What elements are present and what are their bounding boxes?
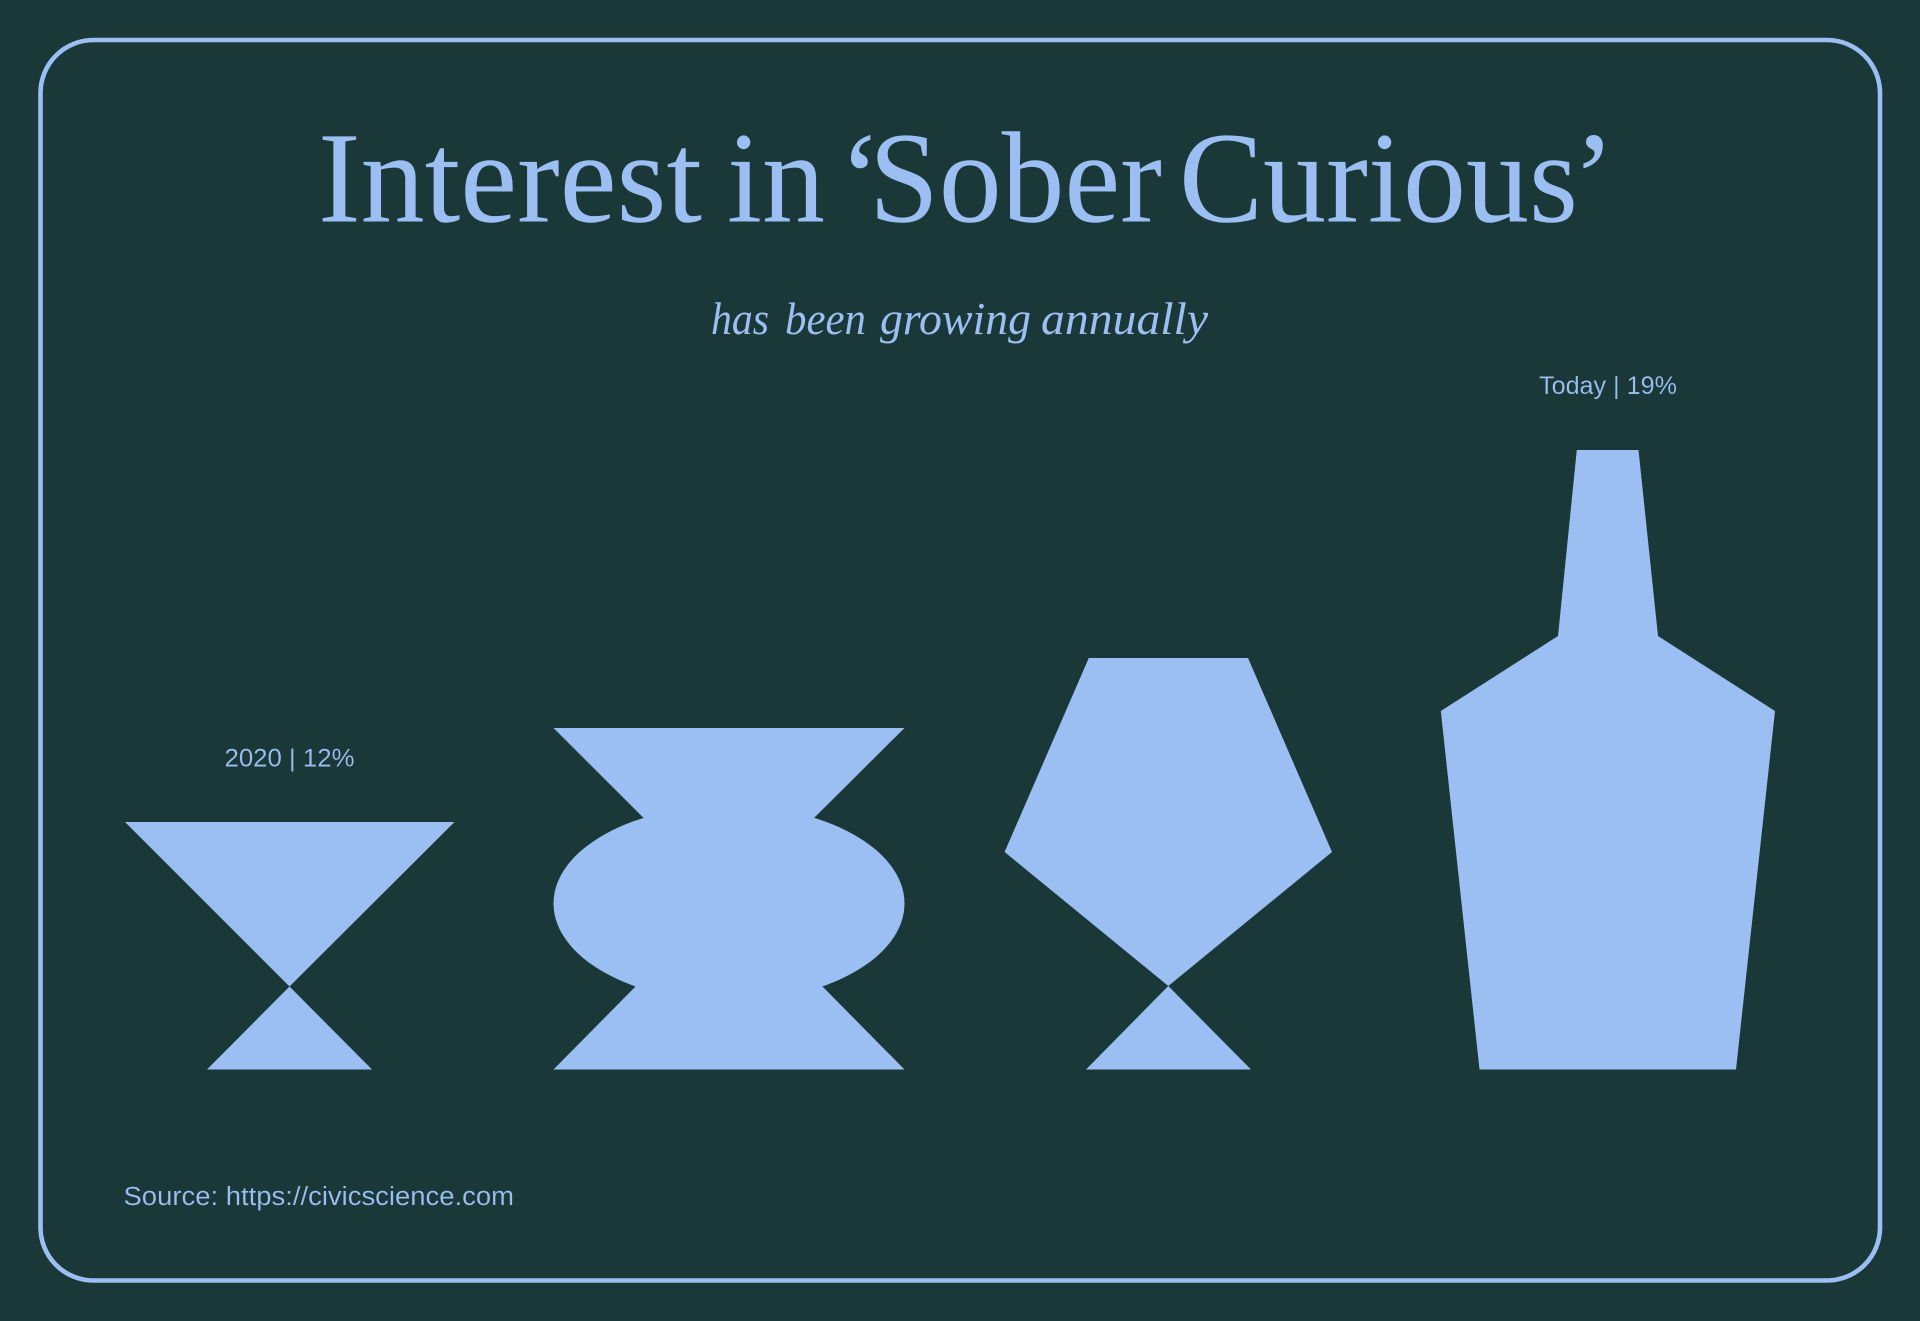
title: ‘ [838, 106, 882, 250]
title: Curious [1179, 106, 1578, 250]
subtitle: annually [1041, 293, 1209, 344]
title: in [727, 106, 825, 250]
title: Interest [318, 106, 702, 250]
source note: Source: https://civicscience.com [124, 1183, 514, 1211]
label: 2020 value: 2020 | 12% [224, 744, 354, 772]
title: ’ [1572, 106, 1615, 250]
subtitle: been [785, 293, 866, 344]
icon: bottle, today [1441, 450, 1775, 1070]
label: today value: Today | 19% [1539, 372, 1677, 400]
icon: martini glass, 2020 [125, 822, 454, 1070]
icon: goblet [1005, 658, 1332, 1070]
subtitle: has [711, 293, 769, 344]
subtitle: growing [880, 293, 1031, 344]
title: Sober [869, 106, 1162, 250]
icon: vase [554, 728, 904, 1070]
